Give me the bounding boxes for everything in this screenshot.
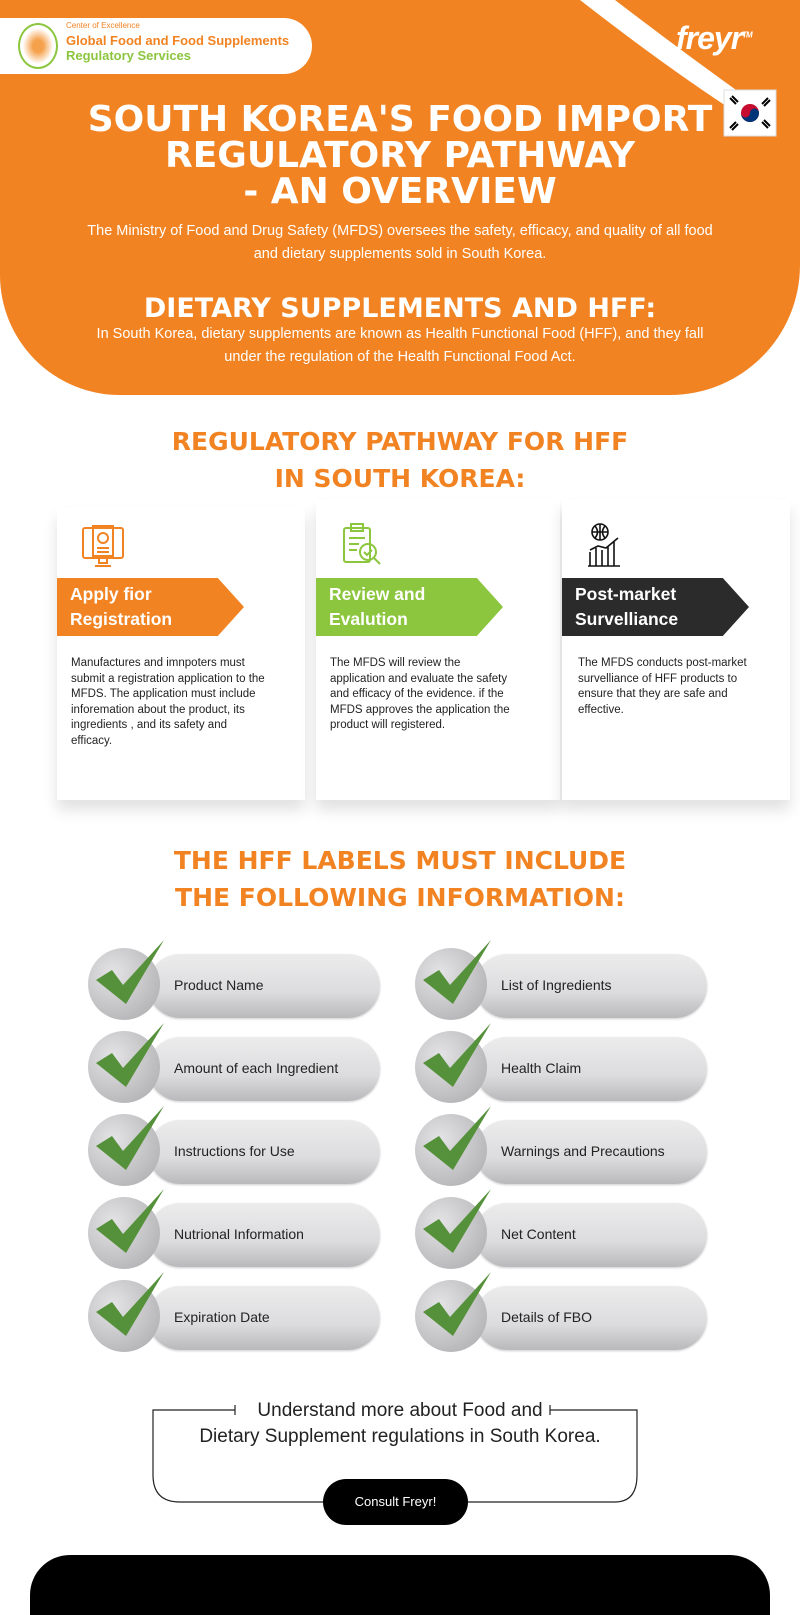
item [415, 940, 708, 1020]
banner: Survelliance [575, 609, 678, 629]
title: REGULATORY PATHWAY [165, 135, 635, 176]
item [415, 1106, 708, 1186]
list: label items [88, 940, 708, 1352]
title [88, 99, 712, 212]
item: Nutrional Information [174, 1226, 304, 1242]
heading: labels [174, 846, 626, 912]
banner: Post-market [575, 584, 676, 604]
item: Details of FBO [501, 1309, 592, 1325]
button: Consult Freyr! [355, 1494, 436, 1509]
heading: regulatory pathway [172, 427, 628, 493]
callout text: Understand more about Food and [257, 1400, 543, 1421]
heading: regulatory pathway: IN SOUTH KOREA: [275, 464, 525, 493]
callout text: Dietary Supplement regulations in South Korea. [199, 1426, 601, 1447]
item [88, 1106, 381, 1186]
panel: review [316, 500, 560, 800]
icon: logo circle [18, 23, 58, 69]
heading: labels: THE FOLLOWING INFORMATION: [175, 883, 625, 912]
callout text [199, 1400, 601, 1447]
icon: monitor [82, 525, 124, 567]
item: Health Claim [501, 1060, 581, 1076]
title: - AN OVERVIEW [243, 171, 557, 212]
text: HFF: In South Korea, dietary supplements are known as Health Functional Food (HFF), and they fall under the regulation of the Health Functional Food Act. [97, 326, 703, 365]
title: SOUTH KOREA'S FOOD IMPORT [88, 99, 712, 140]
logo badge: Global Food and Food Supplements [66, 33, 289, 48]
item: Product Name [174, 977, 263, 993]
item: Expiration Date [174, 1309, 270, 1325]
freyr logo: freyrTM [676, 20, 752, 56]
banner [316, 578, 503, 636]
icon: globe chart [588, 523, 620, 567]
item [415, 1272, 708, 1352]
callout frame [152, 1405, 638, 1503]
banner [57, 578, 244, 636]
heading: regulatory pathway: REGULATORY PATHWAY FOR HFF [172, 427, 628, 456]
panel: apply [57, 508, 305, 800]
banner: Apply fior [70, 584, 152, 604]
logo badge [0, 18, 312, 74]
text: The MFDS conducts post-market survelliance of HFF products to ensure that they are safe and effective. [578, 657, 747, 716]
intro text: The Ministry of Food and Drug Safety (MFDS) oversees the safety, efficacy, and quality of all food and dietary supplements sold in South Korea. [87, 223, 713, 262]
header background [0, 0, 800, 395]
banner [562, 578, 749, 636]
item [415, 1023, 708, 1103]
item: Net Content [501, 1226, 576, 1242]
item [88, 1189, 381, 1269]
heading: labels: THE HFF LABELS MUST INCLUDE [174, 846, 626, 875]
item: Amount of each Ingredient [174, 1060, 338, 1076]
logo text: Center of Excellence [66, 21, 140, 30]
footer black panel [30, 1555, 770, 1615]
text: The MFDS will review the application and evaluate the safety and efficacy of the evidence. if the MFDS approves the application the product will registered. [330, 657, 510, 731]
item [88, 1023, 381, 1103]
item: Instructions for Use [174, 1143, 295, 1159]
banner: Evalution [329, 609, 408, 629]
text: Manufactures and imnpoters must submit a registration application to the MFDS. The application must include inforemation about the product, its ingredients , and its safety and efficacy. [71, 657, 265, 746]
item [88, 940, 381, 1020]
heading: dietary supplements: DIETARY SUPPLEMENTS AND HFF: [144, 293, 656, 324]
icon: clipboard [343, 523, 381, 565]
banner: Registration [70, 609, 172, 629]
item: Warnings and Precautions [501, 1143, 665, 1159]
decorative white ribbon [580, 0, 736, 104]
logo badge: Regulatory Services [66, 48, 191, 63]
panel: post-market [562, 500, 790, 800]
item [415, 1189, 708, 1269]
item: List of Ingredients [501, 977, 612, 993]
icon: korean flag [724, 90, 776, 136]
button [323, 1479, 468, 1525]
banner: Review and [329, 584, 425, 604]
item [88, 1272, 381, 1352]
